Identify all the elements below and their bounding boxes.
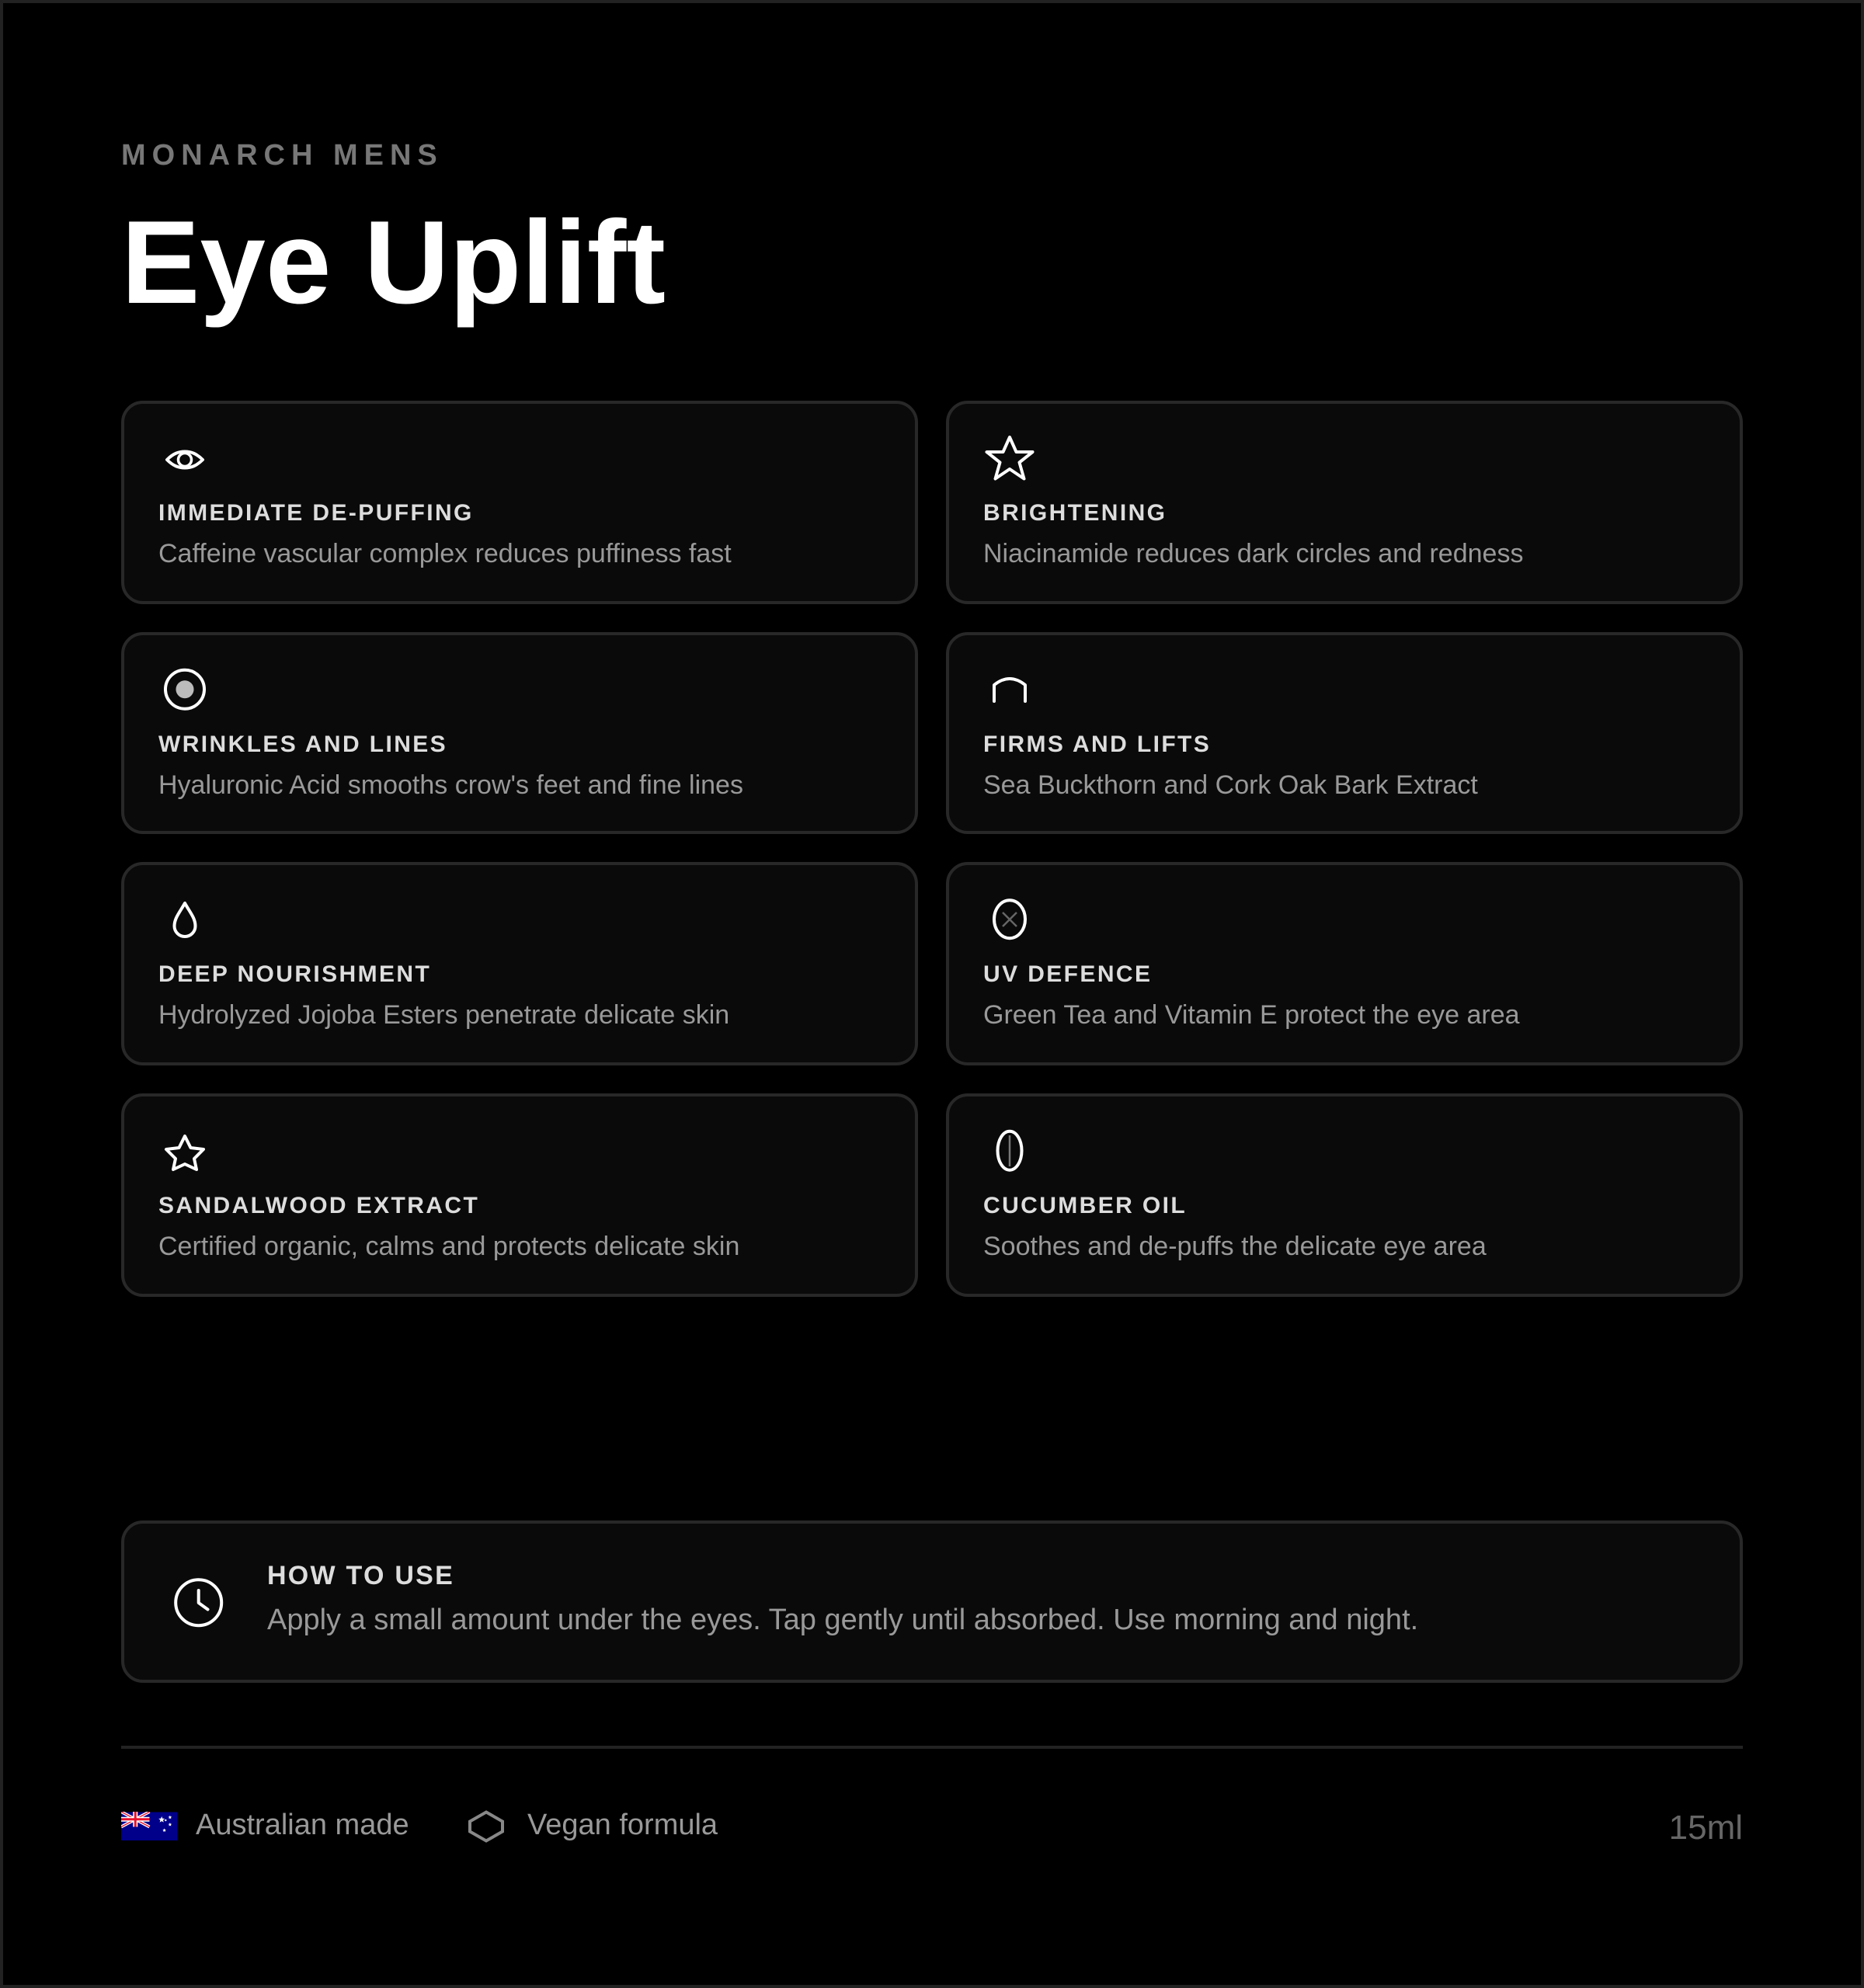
how to use description: Apply a small amount under the eyes. Tap gently until absorbed. Use morning and night. <box>267 1604 1418 1636</box>
icon: clock <box>174 1578 224 1628</box>
feature description: Soothes and de-puffs the delicate eye area <box>983 1232 1487 1261</box>
feature description: Hyaluronic Acid smooths crow's feet and fine lines <box>158 770 743 800</box>
feature title: UV DEFENCE <box>983 961 1152 987</box>
icon: shield with cross <box>993 898 1027 940</box>
feature description: Hydrolyzed Jojoba Esters penetrate delicate skin <box>158 1000 729 1030</box>
feature description: Certified organic, calms and protects delicate skin <box>158 1232 739 1261</box>
feature title: DEEP NOURISHMENT <box>158 961 431 987</box>
feature description: Caffeine vascular complex reduces puffiness fast <box>158 539 732 568</box>
icon: water drop <box>172 901 197 938</box>
panel: deep nourishment <box>121 862 918 1065</box>
feature description: Sea Buckthorn and Cork Oak Bark Extract <box>983 770 1478 800</box>
footer divider <box>121 1746 1743 1749</box>
icon: arch <box>993 677 1027 703</box>
panel: immediate de-puffing <box>121 401 918 604</box>
feature description: Green Tea and Vitamin E protect the eye area <box>983 1000 1520 1030</box>
feature title: CUCUMBER OIL <box>983 1193 1187 1218</box>
feature title: BRIGHTENING <box>983 500 1167 526</box>
feature title: SANDALWOOD EXTRACT <box>158 1193 479 1218</box>
australian made label: Australian made <box>196 1809 409 1841</box>
vegan formula label: Vegan formula <box>527 1809 718 1841</box>
panel: how to use <box>121 1521 1743 1683</box>
panel: wrinkles and lines <box>121 632 918 834</box>
icon: seed <box>996 1129 1024 1172</box>
feature description: Niacinamide reduces dark circles and redness <box>983 539 1523 568</box>
panel: uv defence <box>946 862 1743 1065</box>
icon: ring with dot <box>164 668 206 711</box>
title: Eye Uplift <box>121 196 666 328</box>
icon: small star <box>165 1134 205 1171</box>
panel: cucumber oil <box>946 1093 1743 1297</box>
feature title: IMMEDIATE DE-PUFFING <box>158 500 474 526</box>
volume label: 15ml <box>1669 1809 1743 1847</box>
panel: brightening <box>946 401 1743 604</box>
icon: large star <box>985 435 1035 481</box>
brand label: MONARCH MENS <box>121 139 443 172</box>
panel: firms and lifts <box>946 632 1743 834</box>
feature title: FIRMS AND LIFTS <box>983 732 1211 757</box>
icon: hexagon <box>468 1810 504 1843</box>
icon: australian flag <box>121 1812 177 1840</box>
icon: eye <box>165 450 205 469</box>
feature title: WRINKLES AND LINES <box>158 732 447 757</box>
panel: sandalwood extract <box>121 1093 918 1297</box>
how to use title: HOW TO USE <box>267 1561 454 1590</box>
